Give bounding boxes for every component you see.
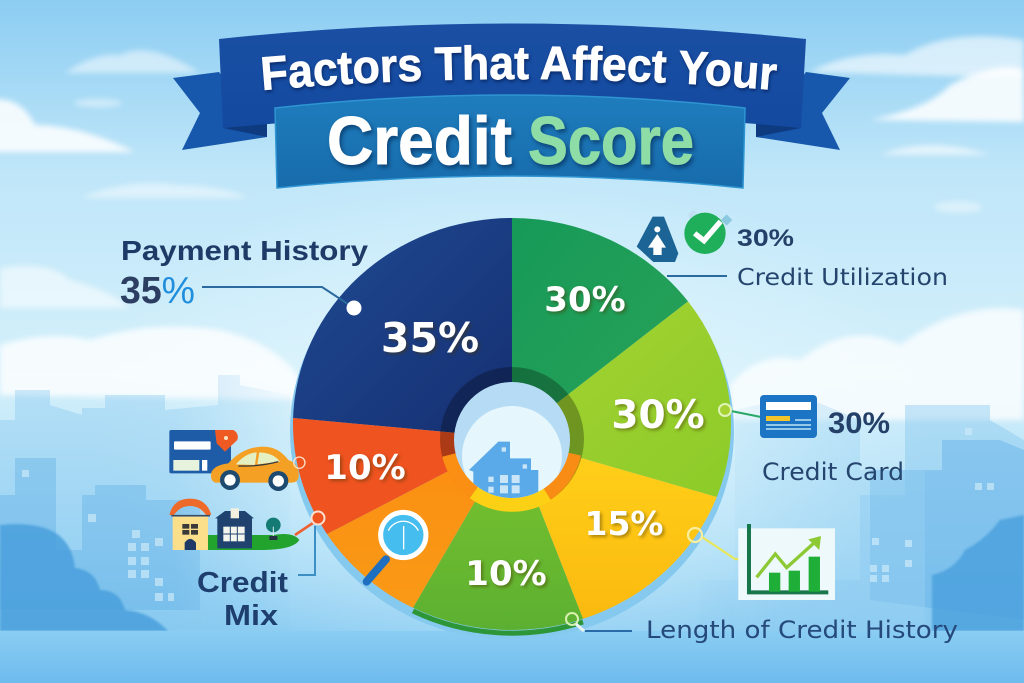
label: credit mix	[169, 430, 324, 632]
center hole	[454, 382, 570, 498]
label: credit utilization: 30%	[737, 225, 794, 252]
icon: card	[760, 395, 817, 438]
chart rim	[290, 222, 734, 640]
label: credit mix: Credit	[197, 567, 288, 599]
segment percentages: 10%	[465, 554, 547, 594]
city skyline	[0, 375, 1024, 630]
segment: length of history	[512, 438, 717, 619]
leader red	[295, 512, 324, 575]
leader yellow	[688, 528, 746, 559]
leader line	[202, 287, 354, 308]
upper ribbon	[219, 24, 806, 128]
segment percentages: 10%	[324, 448, 406, 488]
segment: credit card	[512, 301, 731, 497]
icon: car	[211, 447, 305, 491]
label: credit utilization	[637, 210, 948, 291]
clouds	[0, 36, 1024, 420]
icon: magnifier gauge	[367, 512, 426, 582]
segment: payment history	[293, 218, 512, 438]
trees left	[0, 524, 168, 631]
title line 2: Score	[528, 103, 694, 179]
label: credit utilization: Credit Utilization	[737, 265, 948, 291]
segment: credit mix red	[293, 418, 512, 534]
leader	[719, 404, 761, 417]
leader line	[667, 275, 727, 277]
label: length of credit history	[566, 524, 958, 644]
trees right	[932, 515, 1024, 631]
title line 2: Credit	[327, 103, 512, 179]
label: payment history: Payment History	[121, 235, 368, 266]
banner folds	[223, 122, 801, 137]
title banner	[173, 24, 850, 224]
title line 2	[327, 103, 694, 179]
leader bottom	[566, 613, 632, 631]
banner back tails	[173, 72, 850, 150]
segment percentages: 35%	[381, 314, 479, 362]
label: payment history	[120, 235, 368, 316]
icon: person tag	[637, 217, 678, 262]
label: length of credit history: Length of Credit History	[646, 616, 958, 644]
label: credit card: 30%	[828, 407, 890, 440]
label: credit mix: Mix	[224, 600, 278, 632]
segment: green	[413, 438, 583, 630]
segment: orange	[327, 438, 512, 608]
icon: check badge	[684, 210, 732, 254]
icon: house	[469, 442, 538, 498]
label: credit card	[719, 395, 904, 486]
segment percentages	[324, 280, 705, 594]
inner ring	[440, 367, 584, 511]
lower ribbon	[275, 95, 745, 188]
label: credit card: Credit Card	[762, 458, 904, 486]
segment green rim	[413, 611, 583, 633]
leader dot	[346, 300, 362, 316]
ground band	[0, 631, 1024, 683]
title line 1: Factors That Affect Your	[262, 44, 780, 94]
segment percentages: 30%	[611, 393, 705, 438]
icon: growth chart	[738, 524, 835, 600]
segment: credit utilization	[512, 218, 688, 438]
donut chart	[290, 218, 734, 640]
icon: houses and lawn	[169, 499, 299, 550]
segment percentages: 30%	[544, 280, 626, 320]
icon: credit card with tag	[169, 430, 238, 473]
segment percentages: 15%	[584, 504, 664, 543]
value 35%: 35%	[120, 270, 195, 312]
